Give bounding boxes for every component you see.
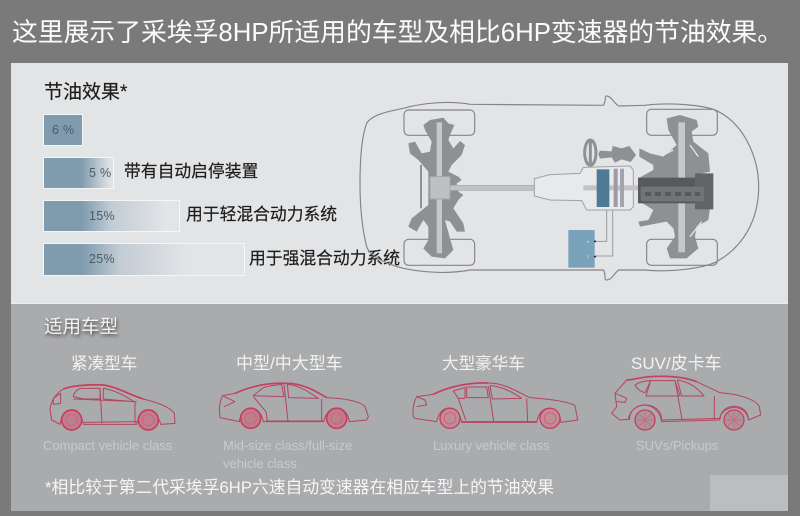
bar: 5% start-stop: 5 %	[89, 166, 111, 180]
steering wheel and column	[585, 140, 636, 165]
rear suspension	[408, 118, 465, 258]
label: mid-size car	[223, 438, 352, 470]
watermark patch	[710, 475, 788, 511]
label: SUV: SUVs/Pickups	[636, 438, 718, 453]
label: compact heading: 紧凑型车	[71, 354, 137, 373]
label: compact car: Compact vehicle class	[43, 438, 172, 453]
wheels	[404, 109, 717, 265]
footnote: *相比较于第二代采埃孚6HP六速自动变速器在相应车型上的节油效果	[45, 478, 554, 497]
bar: 15% mild hybrid: 15%	[89, 209, 115, 223]
label: mid-size heading: 中型/中大型车	[236, 354, 343, 373]
bar: 5% start-stop	[43, 157, 114, 189]
icon: compact car	[50, 384, 176, 431]
icon: SUV	[611, 376, 762, 431]
label: luxury heading: 大型豪华车	[442, 354, 525, 373]
bar: 25% full hybrid	[43, 243, 245, 276]
icon: mid-size car	[218, 382, 369, 430]
front suspension and engine bay	[638, 115, 710, 258]
bar: 6%: 6 %	[52, 123, 74, 137]
bar: 6%	[43, 114, 83, 146]
bar: 25% full hybrid: 25%	[89, 252, 115, 266]
heading: fuel saving: 节油效果*	[44, 82, 127, 103]
label: luxury car: Luxury vehicle class	[433, 438, 549, 453]
battery	[568, 210, 613, 268]
label: SUV heading: SUV/皮卡车	[631, 354, 722, 373]
electric motor	[597, 169, 609, 207]
label: mid-size car: vehicle class	[223, 456, 297, 470]
diagram: car chassis	[359, 95, 760, 281]
car body outline	[360, 96, 759, 280]
label: mid-size car: Mid-size class/full-size	[223, 438, 352, 453]
bar: 15% mild hybrid	[43, 200, 180, 232]
transmission housing	[534, 166, 633, 210]
label: start-stop: 带有自动启停装置	[124, 162, 258, 181]
engine	[638, 173, 713, 209]
driveshaft	[450, 185, 535, 190]
panel: fuel saving effect	[11, 63, 788, 303]
panel: applicable vehicles	[11, 303, 788, 511]
title: 这里展示了采埃孚8HP所适用的车型及相比6HP变速器的节油效果。	[12, 19, 783, 47]
icon: luxury car	[412, 382, 578, 429]
label: full hybrid: 用于强混合动力系统	[249, 249, 400, 268]
label: mild hybrid: 用于轻混合动力系统	[186, 205, 337, 224]
heading: applicable vehicles: 适用车型	[44, 316, 118, 337]
